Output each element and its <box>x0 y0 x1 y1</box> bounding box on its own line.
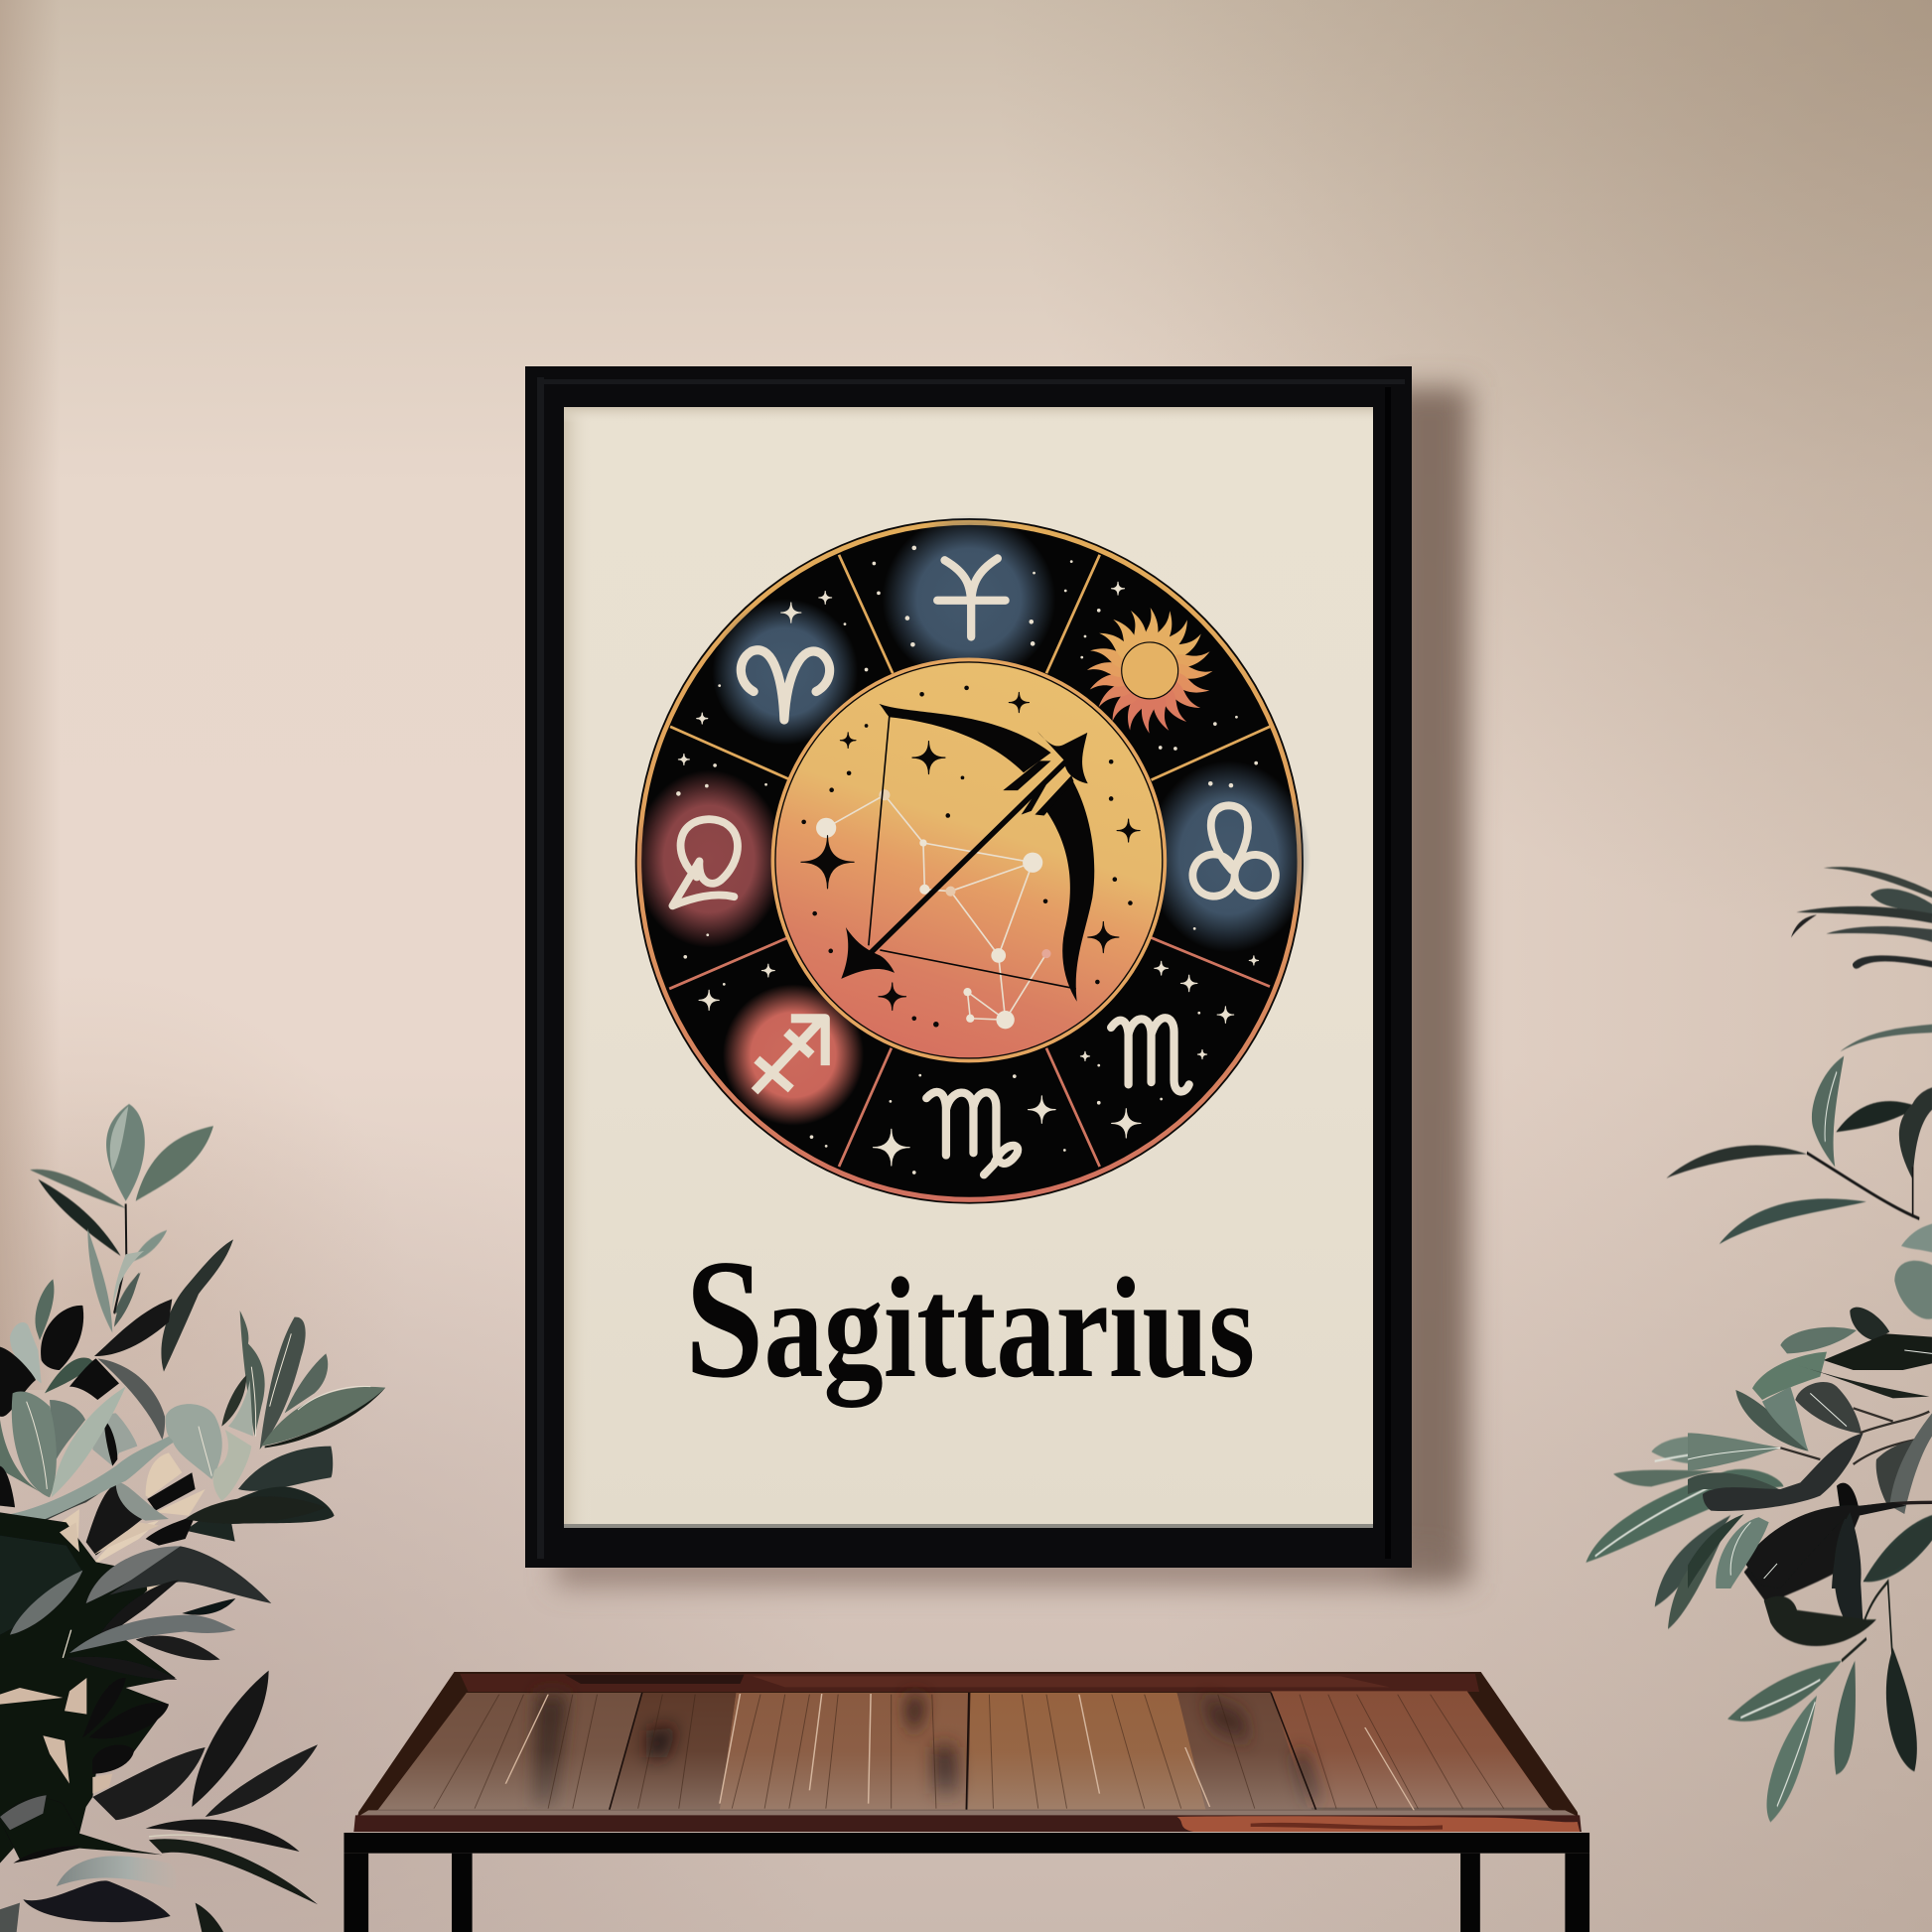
cream stars in the ring <box>678 582 1258 1166</box>
arrow head lower <box>841 927 895 979</box>
lower cluster leaves <box>1586 1436 1932 1646</box>
icon: leo-like trefoil <box>1192 805 1276 897</box>
cream gaps behind the ribbon <box>57 1452 206 1556</box>
plant: right side branches <box>1586 867 1932 1822</box>
black dots in the disc <box>801 686 1133 1028</box>
poster paper <box>564 407 1373 1528</box>
central disc <box>771 658 1167 1062</box>
wood planks <box>376 1691 1553 1810</box>
black picture frame <box>525 366 1412 1568</box>
outer ring <box>635 518 1304 1204</box>
icon: sagittarius arrow glyph <box>755 1019 825 1091</box>
title: Sagittarius <box>685 1225 1255 1414</box>
plant: left lower branches <box>0 1496 326 1932</box>
tray body <box>353 1672 1582 1832</box>
arrow tip <box>1037 731 1088 783</box>
bow lower limb <box>1046 780 1094 1002</box>
cream dots in the ring <box>676 546 1258 1174</box>
frame shadow on the wall <box>556 387 1469 1587</box>
plant: left middle cluster <box>0 1239 385 1598</box>
constellation <box>816 789 1051 1029</box>
tray front edge <box>353 1810 1582 1832</box>
bottom leaves <box>1595 1072 1917 1822</box>
wood grain lines <box>434 1695 1504 1809</box>
zodiac symbols in the ring <box>672 558 1276 1174</box>
bow and arrow <box>841 704 1094 1002</box>
plant: right dense cluster <box>1688 1308 1932 1588</box>
black stars in the disc <box>801 692 1140 1011</box>
icon: scorpio-like glyph <box>926 1092 1018 1174</box>
bowstring <box>869 714 1076 989</box>
segment dividers <box>669 555 1270 1167</box>
icon: m-shaped glyph <box>1111 1018 1189 1091</box>
bow upper limb <box>879 704 1051 772</box>
upper thin leaves <box>1791 867 1932 1051</box>
icon: aries <box>741 650 830 720</box>
icon: libra-like loop <box>672 819 738 905</box>
metal frame <box>344 1833 1589 1932</box>
middle sprig leaves <box>1666 1056 1932 1319</box>
plant: left top sprig <box>30 1104 213 1332</box>
arrow shaft <box>853 757 1071 971</box>
icon: top branching symbol <box>937 558 1006 636</box>
zodiac wheel <box>633 514 1311 1204</box>
colored glow blobs behind the symbols <box>633 514 1311 1126</box>
tray back rim <box>460 1674 1479 1692</box>
fletching <box>1003 760 1073 815</box>
console table <box>344 1672 1589 1932</box>
icon: sun <box>1087 608 1213 734</box>
